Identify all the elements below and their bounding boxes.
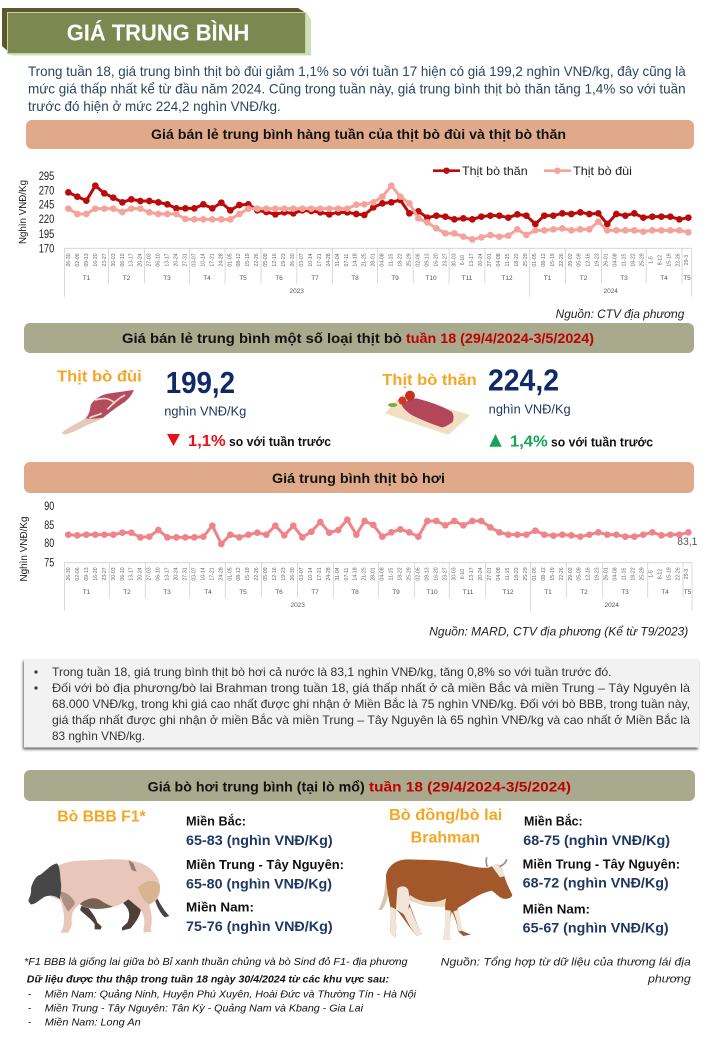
chart 1 week labels: 26-30 — [290, 253, 296, 267]
chart 1 week labels: 15-19 — [245, 253, 251, 267]
chart 2 week labels: 01-05 — [532, 567, 538, 581]
chart 2 week labels: 21-25 — [362, 567, 368, 581]
panel: thịt bò thăn price: so với tuần trước — [551, 436, 653, 450]
chart 1 week labels: 6-10 — [460, 255, 466, 265]
heading: live cattle price — [24, 462, 694, 493]
chart 1 week labels: 06-10 — [120, 253, 126, 267]
source note: chart 2: Nguồn: MARD, CTV địa phương (Kể từ T9/2023) — [429, 627, 688, 639]
chart 1 y axis labels: Nghìn VNĐ/Kg — [17, 180, 29, 244]
panel: commentary box: Đối với bò địa phương/bò lai Brahman trong tuần 18, giá thấp nhất ở cả miền Bắc và miền Trung – Tây Nguyên là — [52, 680, 690, 695]
chart 2 week labels: 24-28 — [218, 567, 224, 581]
chart 2 month and year labels: 2023 — [290, 602, 305, 609]
line chart: retail beef price — [17, 164, 692, 297]
panel: local / Brahman cattle: Bò đồng/bò lai — [389, 807, 502, 824]
heading: slaughterhouse price — [24, 770, 695, 801]
chart 2 month and year labels: T8 — [351, 589, 359, 596]
chart 2 week labels: 04-08 — [380, 567, 386, 581]
panel: thịt bò đùi price: so với tuần trước — [229, 435, 331, 449]
footnotes: Dữ liệu được thu thập trong tuần 18 ngày 30/4/2024 từ các khu vực sau: — [27, 973, 389, 985]
chart 2 week labels: 18-22 — [398, 567, 404, 581]
chart 1 week labels: 24-28 — [218, 253, 224, 267]
chart 2 week labels: 20-24 — [174, 567, 180, 581]
intro text: trước đó hiện ở mức 224,2 nghìn VNĐ/kg. — [28, 98, 281, 114]
chart 1 week labels: 08-12 — [236, 253, 242, 267]
chart 2 week labels: 12-16 — [586, 567, 592, 581]
chart 1 axis frame — [64, 248, 692, 297]
chart 2 week labels: 19-23 — [595, 567, 601, 581]
footnotes: - — [28, 988, 32, 1000]
panel: BBB F1 cattle — [28, 809, 344, 934]
chart 1 month and year labels: T4 — [203, 275, 211, 282]
chart 2 y axis labels: 85 — [44, 520, 54, 532]
chart 2 week labels: 16-20 — [433, 567, 439, 581]
heading: weekly retail price: Giá bán lẻ trung bình hàng tuần của thịt bò đùi và thịt bò thăn — [151, 127, 566, 142]
chart 1 week labels: 22-26 — [559, 253, 565, 267]
panel: commentary box: Trong tuần 18, giá trung bình thịt bò hơi cả nước là 83,1 nghìn VNĐ/kg, tăng 0,8% so với tuần trước đó. — [52, 665, 612, 679]
chart 1 y axis labels: 170 — [39, 244, 54, 256]
chart 2 week labels: 11-15 — [505, 567, 511, 580]
chart 2 month and year labels — [83, 589, 692, 609]
chart 1 week labels: 04-08 — [613, 253, 619, 267]
chart 2 week labels: 27-31 — [182, 567, 188, 581]
panel: commentary box: 83 nghìn VNĐ/kg. — [52, 729, 145, 743]
chart 1 week labels: 18-22 — [630, 253, 636, 267]
chart 2 week labels: 14-18 — [353, 567, 359, 581]
chart 2 week labels: 6-10 — [460, 569, 466, 579]
chart 1 month and year labels: 2024 — [603, 288, 618, 295]
panel: BBB F1 cattle: Miền Nam: — [186, 901, 254, 915]
footnotes: - — [28, 1017, 32, 1029]
panel: thịt bò đùi price: 199,2 — [166, 365, 235, 400]
chart 2 month and year labels: T12 — [502, 589, 514, 596]
chart 2 month and year labels: T5 — [684, 589, 692, 596]
panel: local / Brahman cattle: 68-75 (nghìn VNĐ/Kg) — [523, 832, 670, 848]
chart 1 month and year labels: T3 — [620, 275, 628, 282]
chart 2 y axis labels: 90 — [44, 501, 54, 513]
icon: beef leg cut — [62, 390, 134, 435]
chart 1 y axis labels: 270 — [39, 186, 54, 198]
chart 1 month and year labels: T7 — [311, 275, 319, 282]
chart 2 week labels: 03-07 — [191, 567, 197, 581]
chart 1 week labels: 03-07 — [191, 253, 197, 267]
panel: thịt bò đùi price — [57, 365, 331, 450]
chart 2 week labels: 18-22 — [630, 567, 636, 581]
panel: local / Brahman cattle: Brahman — [411, 830, 480, 847]
chart 1 month and year labels — [83, 275, 691, 295]
heading: live cattle price: Giá trung bình thịt bò hơi — [272, 471, 445, 486]
chart 2 week labels: 09-13 — [424, 567, 430, 581]
panel: thịt bò đùi price: nghìn VNĐ/Kg — [164, 405, 246, 419]
title banner: GIÁ TRUNG BÌNH — [67, 19, 249, 46]
chart 2 week labels: 08-12 — [236, 567, 242, 581]
chart 1 week labels: 25-29 — [639, 253, 645, 267]
chart 1 y axis labels: 195 — [39, 229, 54, 241]
chart 2 week labels: 11-15 — [622, 567, 628, 580]
chart 1 week labels: 1-5 — [648, 256, 654, 264]
chart 1 week labels: 18-22 — [398, 253, 404, 267]
chart 1 week labels: 23-27 — [442, 253, 448, 267]
chart 2 week labels: 12-16 — [272, 567, 278, 581]
chart 2 week labels: 06-10 — [156, 567, 162, 581]
chart 2 axis frame — [64, 563, 692, 611]
chart 2 week labels — [66, 567, 690, 581]
chart 1 week labels: 06-10 — [156, 253, 162, 267]
chart 2 week labels: 06-10 — [120, 567, 126, 581]
chart 1 week labels: 27-01 — [487, 253, 493, 267]
chart 2 week labels: 03-07 — [299, 567, 305, 581]
panel: thịt bò thăn price: nghìn VNĐ/Kg — [489, 402, 571, 416]
chart 2 week labels: 27-01 — [487, 567, 493, 581]
chart 1 week labels: 18-22 — [514, 253, 520, 267]
panel: BBB F1 cattle: 65-83 (nghìn VNĐ/Kg) — [186, 832, 333, 848]
chart 1 week labels: 16-20 — [93, 253, 99, 267]
chart 1 week labels: 09-13 — [424, 253, 430, 267]
source note: cattle prices — [441, 957, 692, 985]
chart 1 week labels: 22-26 — [254, 253, 260, 267]
series: thịt bò thăn — [68, 186, 688, 224]
chart 2 week labels: 07-11 — [344, 567, 350, 580]
chart 2 week labels: 15-19 — [550, 567, 556, 581]
chart 1 week labels: 20-24 — [138, 253, 144, 267]
chart 1 week labels: 20-24 — [174, 253, 180, 267]
chart 2 month and year labels: 2024 — [604, 602, 619, 609]
chart 2 month and year labels: T4 — [661, 589, 669, 596]
chart 2 week labels: 22-26 — [675, 567, 681, 581]
chart 2 week labels: 18-22 — [514, 567, 520, 581]
chart 1 month and year labels: T6 — [275, 275, 283, 282]
chart 2 week labels: 28-01 — [371, 567, 377, 581]
panel: BBB F1 cattle: 75-76 (nghìn VNĐ/Kg) — [186, 918, 333, 934]
chart 2 month and year labels: T7 — [311, 589, 319, 596]
chart 1 month and year labels: T11 — [462, 275, 473, 282]
chart 1 month and year labels: T12 — [501, 275, 513, 282]
heading: slaughterhouse price: Giá bò hơi trung bình (tại lò mổ) — [148, 780, 365, 795]
chart 1 legend — [433, 164, 632, 178]
chart 2 week labels: 25-29 — [523, 567, 529, 581]
panel: BBB F1 cattle: Miền Trung - Tây Nguyên: — [186, 858, 344, 872]
panel: commentary box: giá thấp nhất được ghi nhận ở miền Bắc và miền Trung – Tây Nguyên là 65 nghìn VNĐ/kg và cao nhất ở Miền Bắc là — [52, 712, 690, 727]
chart 2 week labels: 27-03 — [147, 567, 153, 581]
chart 2 week labels: 31-04 — [335, 567, 341, 581]
footnotes — [24, 956, 417, 1029]
chart 1 week labels: 24-28 — [326, 253, 332, 267]
source note: chart 1: Nguồn: CTV địa phương — [556, 309, 685, 321]
chart 1 month and year labels: 2023 — [289, 288, 304, 295]
chart 2 month and year labels: T4 — [204, 589, 212, 596]
panel: BBB F1 cattle: Miền Bắc: — [186, 814, 246, 829]
chart 1 month and year labels: T5 — [683, 275, 691, 282]
panel: local / Brahman cattle: Miền Bắc: — [524, 814, 583, 829]
chart 2 week labels: 02-06 — [415, 567, 421, 581]
heading: retail price by cut: tuần 18 (29/4/2024-3/5/2024) — [406, 331, 594, 346]
footnotes: *F1 BBB là giống lai giữa bò Bỉ xanh thuần chủng và bò Sind đỏ F1- địa phương — [24, 956, 408, 968]
chart 2 week labels: 10-14 — [308, 567, 314, 581]
chart 1 week labels: 03-07 — [299, 253, 305, 267]
panel: thịt bò đùi price: 1,1% — [188, 433, 226, 450]
chart 1 week labels: 17-21 — [317, 253, 323, 267]
chart 1 week labels: 23-27 — [102, 253, 108, 267]
chart 2 week labels: 04-08 — [496, 567, 502, 581]
footnotes: Miền Nam: Quảng Ninh, Huyện Phú Xuyên, Hoài Đức và Thường Tín - Hà Nội — [45, 988, 417, 1000]
panel: thịt bò thăn price: 1,4% — [510, 434, 548, 451]
chart 2 week labels: 23-27 — [442, 567, 448, 581]
chart 1 series — [68, 186, 688, 239]
chart 1 week labels: 25-29 — [406, 253, 412, 267]
chart 1 week labels: 17-21 — [209, 253, 215, 267]
chart 1 month and year labels: T8 — [351, 275, 359, 282]
chart 1 week labels: 16-20 — [433, 253, 439, 267]
chart 2 y axis labels — [18, 501, 54, 582]
chart 1 week labels: 12-16 — [586, 253, 592, 267]
chart 2 month and year labels: T2 — [580, 589, 588, 596]
footnotes: Miền Trung - Tây Nguyên: Tân Kỳ - Quảng Nam và Kbang - Gia Lai — [45, 1003, 364, 1015]
panel: BBB F1 cattle: 65-80 (nghìn VNĐ/Kg) — [186, 875, 332, 891]
series: thịt bò đùi — [68, 186, 688, 239]
chart 1 month and year labels: T2 — [123, 275, 131, 282]
intro text: Trong tuần 18, giá trung bình thịt bò đùi giảm 1,1% so với tuần 17 hiện có giá 199,2 nghìn VNĐ/kg, đây cũng là — [28, 63, 686, 79]
chart 1 week labels: 14-18 — [353, 253, 359, 267]
panel: BBB F1 cattle: Bò BBB F1* — [57, 809, 147, 826]
chart 1 week labels: 05-09 — [263, 253, 269, 267]
chart 1 week labels: 10-14 — [200, 253, 206, 267]
chart 2 week labels: 16-20 — [93, 567, 99, 581]
chart 1 week labels: 11-15 — [389, 253, 395, 266]
chart 2 month and year labels: T3 — [163, 589, 171, 596]
chart 1 week labels: 28-01 — [371, 253, 377, 267]
chart 2 week labels: 08-12 — [541, 567, 547, 581]
chart 1 month and year labels: T10 — [425, 275, 437, 282]
chart 2 month and year labels: T1 — [544, 589, 552, 596]
heading: slaughterhouse price: tuần 18 (29/4/2024-3/5/2024) — [369, 780, 571, 795]
chart 1 week labels: 01-05 — [227, 253, 233, 267]
chart 1 week labels: 13-17 — [469, 253, 475, 267]
chart 1 month and year labels: T2 — [580, 275, 588, 282]
panel: thịt bò thăn price: 224,2 — [488, 363, 559, 398]
footnotes: Miền Nam: Long An — [45, 1017, 141, 1029]
chart 1 week labels: 19-23 — [281, 253, 287, 267]
heading: weekly retail price — [26, 120, 694, 149]
chart 2 week labels: 22-26 — [254, 567, 260, 581]
chart 2 month and year labels: T3 — [621, 589, 629, 596]
chart 1 week labels: 10-14 — [308, 253, 314, 267]
chart 2 week labels: 26-30 — [66, 567, 72, 581]
chart 1 legend: Thịt bò thăn — [462, 164, 528, 178]
source note: cattle prices: Nguồn: Tổng hợp từ dữ liệu của thương lái địa — [441, 957, 691, 969]
chart 1 y axis labels: 295 — [39, 171, 54, 183]
chart 2 data label: 83,1 — [677, 536, 697, 548]
chart 2 week labels: 24-28 — [326, 567, 332, 581]
chart 2 y axis labels: Nghìn VNĐ/Kg — [18, 516, 30, 582]
chart 1 week labels: 04-08 — [496, 253, 502, 267]
chart 1 week labels: 29-02 — [568, 253, 574, 267]
chart 1 week labels: 08-12 — [541, 253, 547, 267]
chart 1 y axis labels: 245 — [39, 200, 54, 212]
chart 2 week labels: 25-29 — [406, 567, 412, 581]
chart 1 week labels: 15-19 — [666, 253, 672, 267]
chart 2 week labels: 01-05 — [227, 567, 233, 581]
chart 1 week labels: 11-15 — [505, 253, 511, 266]
chart 1 week labels: 29-3 — [684, 255, 690, 265]
chart 2 month and year labels: T5 — [239, 589, 247, 596]
chart 1 week labels: 27-03 — [147, 253, 153, 267]
chart 1 week labels: 26-01 — [604, 253, 610, 267]
chart 2 week labels: 13-17 — [469, 567, 475, 581]
chart 2 week labels: 30-03 — [111, 567, 117, 581]
chart 1 week labels: 15-19 — [550, 253, 556, 267]
chart 1 week labels: 04-08 — [380, 253, 386, 267]
chart 1 month and year labels: T4 — [660, 275, 668, 282]
icon: BBB bull — [28, 859, 169, 933]
panel: commentary box — [24, 659, 699, 748]
panel: local / Brahman cattle: 68-72 (nghìn VNĐ/Kg) — [523, 874, 669, 890]
title banner — [2, 8, 311, 56]
chart 2 month and year labels: T10 — [426, 589, 438, 596]
chart 2 week labels: 26-01 — [604, 567, 610, 581]
panel: commentary box: 68.000 VNĐ/kg, trong khi giá cao nhất được ghi nhận ở Miền Bắc là 75 nghìn VNĐ/kg. Đối với bò BBB, trong tuần này, — [52, 696, 690, 711]
chart 2 month and year labels: T2 — [123, 589, 131, 596]
chart 2 week labels: 23-27 — [102, 567, 108, 581]
chart 1 y axis labels — [17, 171, 54, 256]
chart 2 y axis labels: 80 — [44, 538, 54, 550]
intro text — [28, 63, 686, 114]
chart 2 week labels: 26-30 — [290, 567, 296, 581]
panel: local / Brahman cattle — [378, 807, 680, 940]
chart 2 week labels: 09-13 — [84, 567, 90, 581]
chart 1 week labels — [66, 253, 690, 267]
chart 2 week labels: 11-15 — [389, 567, 395, 580]
chart 1 week labels: 8-12 — [657, 255, 663, 265]
chart 2 week labels: 25-29 — [639, 567, 645, 581]
chart 1 week labels: 27-31 — [182, 253, 188, 267]
chart 2 week labels: 15-19 — [666, 567, 672, 581]
chart 1 month and year labels: T9 — [391, 275, 399, 282]
chart 2 week labels: 04-08 — [613, 567, 619, 581]
source note: cattle prices: phương — [647, 973, 692, 985]
panel: local / Brahman cattle: 65-67 (nghìn VNĐ/Kg) — [523, 920, 669, 936]
panel: local / Brahman cattle: Miền Nam: — [523, 902, 590, 916]
chart 1 week labels: 02-06 — [415, 253, 421, 267]
chart 1 month and year labels: T1 — [83, 275, 91, 282]
chart 2 week labels: 17-21 — [317, 567, 323, 581]
chart 2 week labels: 20-24 — [138, 567, 144, 581]
chart 1 week labels: 25-29 — [523, 253, 529, 267]
chart 1 week labels: 30-03 — [451, 253, 457, 267]
icon: steak on board — [385, 391, 470, 435]
footnotes: - — [28, 1003, 32, 1015]
intro text: mức giá thấp nhất kể từ đầu năm 2024. Cũng trong tuần này, giá trung bình thịt bò thăn tăng 1,4% so với tuần — [28, 80, 686, 96]
panel: thịt bò đùi price: Thịt bò đùi — [57, 369, 142, 386]
panel: local / Brahman cattle: Miền Trung - Tây Nguyên: — [523, 857, 680, 871]
icon: down triangle — [167, 434, 180, 446]
chart 1 week labels: 07-11 — [344, 253, 350, 266]
chart 2 week labels: 19-23 — [281, 567, 287, 581]
chart 1 week labels: 12-16 — [272, 253, 278, 267]
icon: up triangle — [489, 434, 502, 447]
chart 2 week labels: 1-5 — [648, 570, 654, 578]
chart 1 week labels: 19-23 — [595, 253, 601, 267]
chart 2 week labels: 30-03 — [451, 567, 457, 581]
chart 2 week labels: 29-3 — [684, 569, 690, 579]
chart 2 week labels: 20-24 — [478, 567, 484, 581]
chart 2 week labels: 13-17 — [165, 567, 171, 581]
chart 1 week labels: 30-03 — [111, 253, 117, 267]
chart 2 week labels: 10-14 — [200, 567, 206, 581]
panel: thịt bò thăn price — [382, 363, 653, 451]
heading: retail price by cut — [24, 323, 694, 353]
icon: brown cow — [378, 857, 512, 940]
chart 1 week labels: 20-24 — [478, 253, 484, 267]
chart 1 week labels: 26-30 — [66, 253, 72, 267]
line chart: live cattle price — [18, 501, 697, 611]
chart 1 week labels: 13-17 — [165, 253, 171, 267]
chart 2 week labels: 05-09 — [263, 567, 269, 581]
chart 2 week labels: 02-06 — [75, 567, 81, 581]
chart 1 week labels: 11-15 — [622, 253, 628, 266]
chart 1 week labels: 31-04 — [335, 253, 341, 267]
chart 1 week labels: 01-05 — [532, 253, 538, 267]
chart 2 month and year labels: T6 — [275, 589, 283, 596]
chart 2 month and year labels: T1 — [83, 589, 91, 596]
chart 2 week labels: 05-09 — [577, 567, 583, 581]
chart 1 month and year labels: T3 — [163, 275, 171, 282]
chart 1 week labels: 13-17 — [129, 253, 135, 267]
chart 1 week labels: 02-06 — [75, 253, 81, 267]
chart 2 week labels: 13-17 — [129, 567, 135, 581]
heading: retail price by cut: Giá bán lẻ trung bình một số loại thịt bò — [122, 331, 402, 346]
chart 1 legend: Thịt bò đùi — [573, 164, 632, 178]
chart 2 week labels: 17-21 — [209, 567, 215, 581]
chart 1 week labels: 05-09 — [577, 253, 583, 267]
chart 1 week labels: 21-25 — [362, 253, 368, 267]
chart 2 month and year labels: T9 — [392, 589, 400, 596]
chart 2 week labels: 8-12 — [657, 569, 663, 579]
chart 2 series — [68, 520, 688, 544]
chart 2 month and year labels: T11 — [463, 589, 474, 596]
panel: thịt bò thăn price: Thịt bò thăn — [382, 372, 477, 389]
chart 1 month and year labels: T1 — [544, 275, 552, 282]
chart 1 week labels: 22-26 — [675, 253, 681, 267]
chart 2 y axis labels: 75 — [44, 558, 54, 570]
chart 1 y axis labels: 220 — [39, 214, 54, 226]
chart 2 week labels: 15-19 — [245, 567, 251, 581]
chart 2 week labels: 29-02 — [568, 567, 574, 581]
chart 1 month and year labels: T5 — [239, 275, 247, 282]
chart 1 week labels: 09-13 — [84, 253, 90, 267]
chart 2 week labels: 22-26 — [559, 567, 565, 581]
